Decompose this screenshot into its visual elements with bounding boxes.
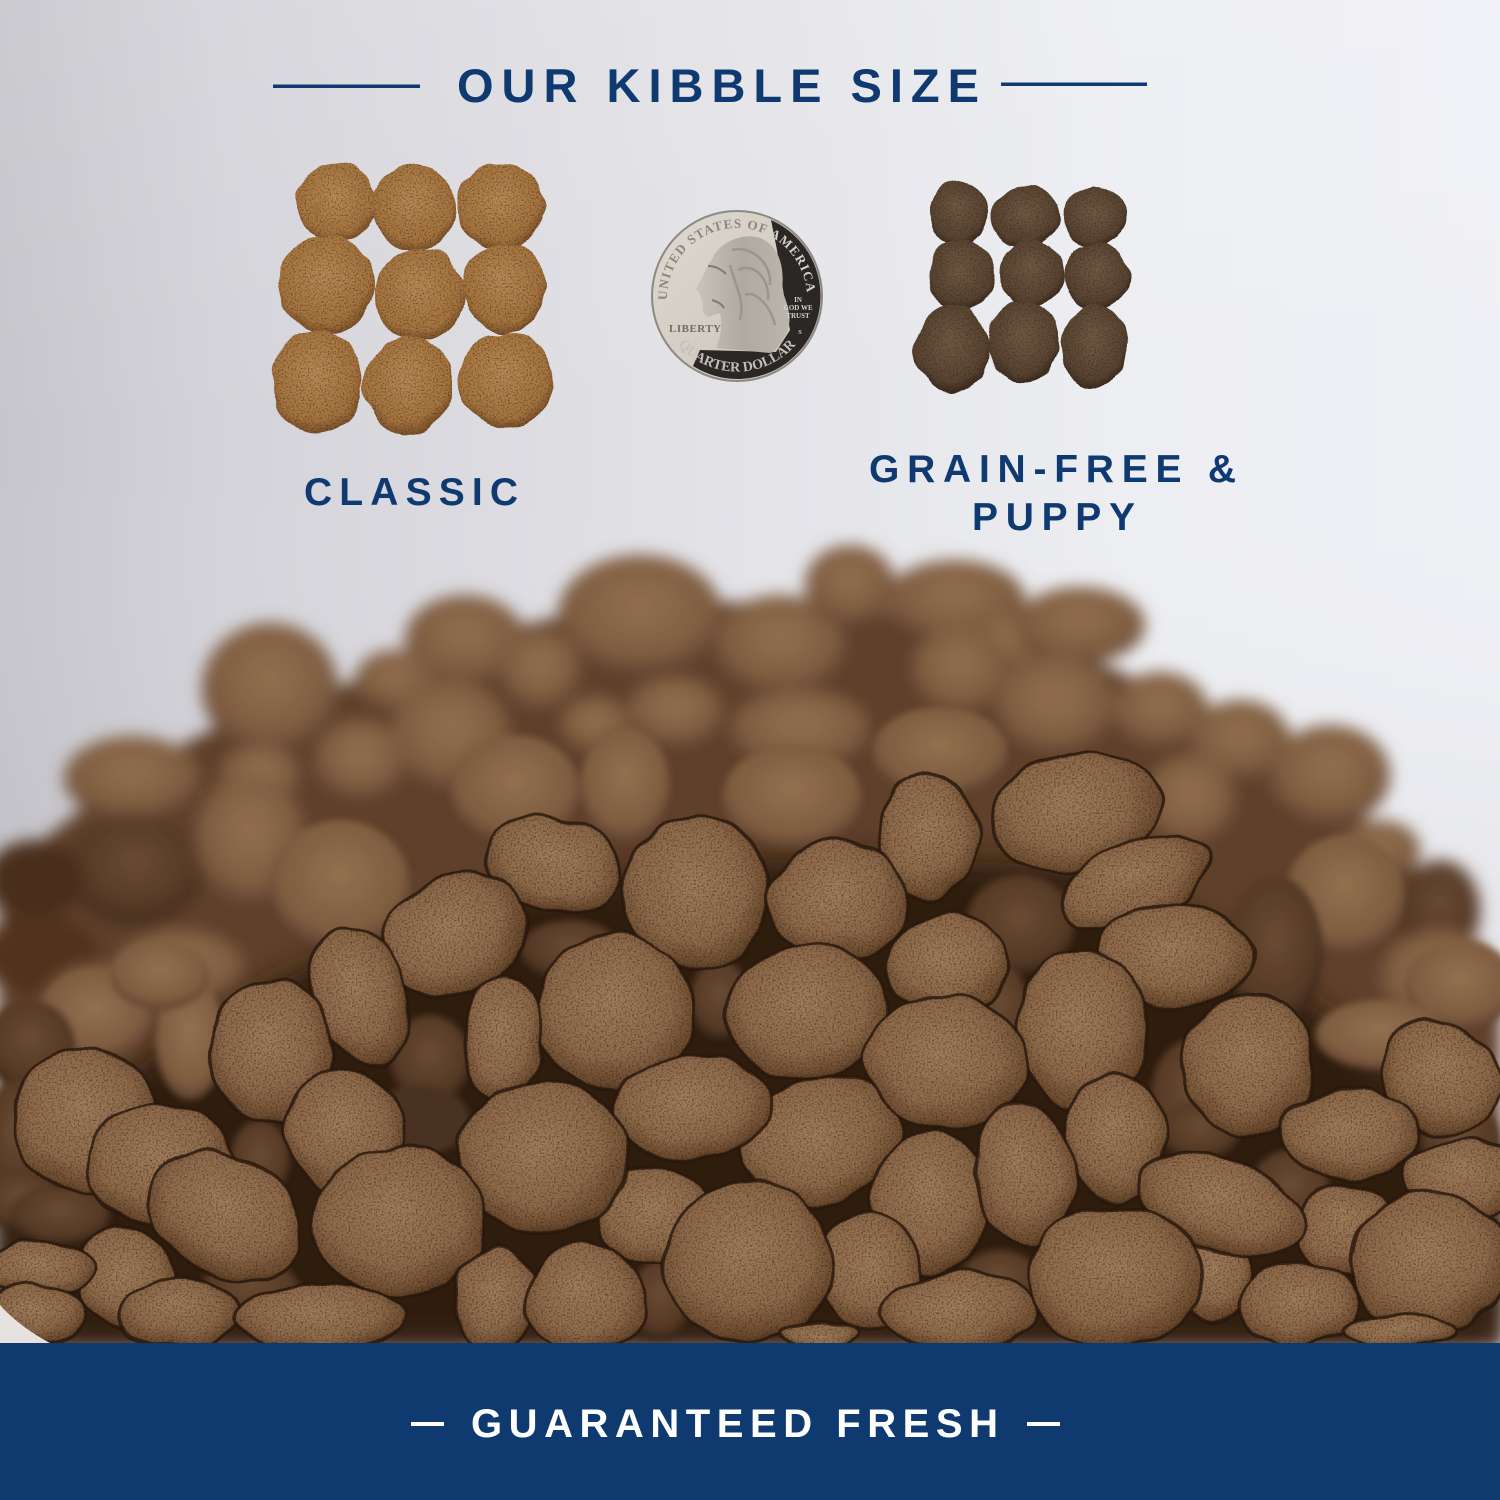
label: grain-free and puppy: GRAIN-FREE & bbox=[869, 448, 1236, 491]
kibble pile photo bbox=[0, 545, 1500, 1352]
bowl corner bottom left bbox=[0, 1305, 50, 1343]
title bbox=[273, 59, 1147, 112]
classic kibble grid bbox=[271, 163, 553, 434]
mid-focus kibbles bbox=[0, 707, 1500, 1340]
label: grain-free and puppy bbox=[869, 448, 1236, 539]
in-focus kibbles bbox=[0, 740, 1500, 1352]
quarter dollar coin: S bbox=[798, 330, 802, 336]
blurred background kibbles bbox=[0, 545, 1500, 1345]
quarter dollar coin: LIBERTY bbox=[669, 323, 722, 335]
quarter dollar coin: TRUST bbox=[786, 312, 810, 320]
dark coin field bbox=[693, 220, 821, 379]
label: grain-free and puppy: PUPPY bbox=[972, 496, 1135, 539]
dark gaps between kibbles bbox=[0, 858, 1500, 1345]
quarter dollar coin bbox=[651, 210, 823, 382]
label: classic: CLASSIC bbox=[304, 471, 518, 514]
quarter dollar coin: IN bbox=[794, 296, 802, 304]
quarter dollar coin: UNITED STATES OF AMERICA bbox=[658, 219, 815, 300]
quarter dollar coin: GOD WE bbox=[783, 304, 813, 312]
grain-free and puppy kibble grid bbox=[914, 181, 1130, 392]
title: OUR KIBBLE SIZE bbox=[457, 59, 979, 112]
footer banner: GUARANTEED FRESH bbox=[471, 1402, 998, 1446]
Washington portrait bbox=[696, 236, 789, 353]
quarter dollar coin: QUARTER DOLLAR bbox=[680, 340, 796, 372]
footer banner bbox=[0, 1343, 1500, 1500]
